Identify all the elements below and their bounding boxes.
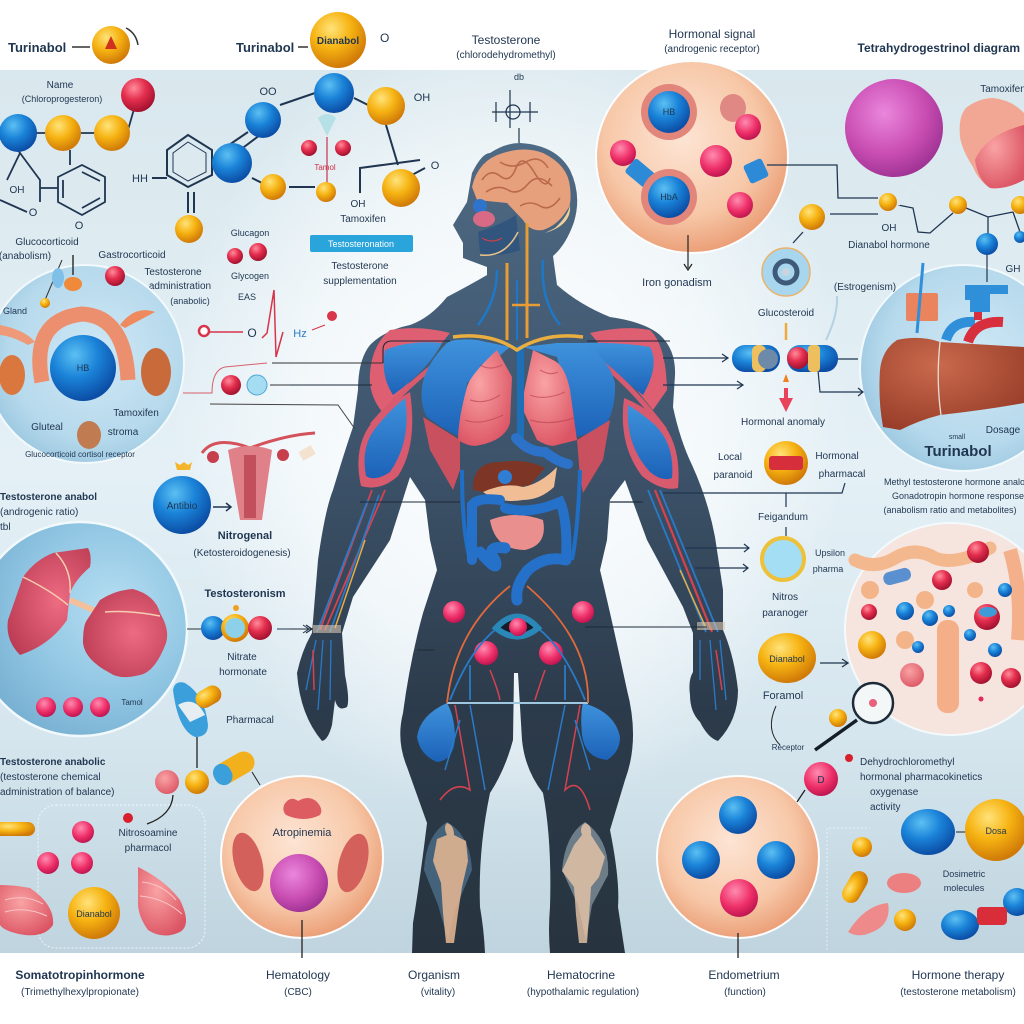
icon: capsules left: Pharmacal — [226, 715, 274, 726]
icon: gold ring sphere with labels: pharmacal — [819, 469, 865, 480]
molecule: top left ring: (Chloroprogesteron) — [22, 94, 102, 104]
top-left labels: Glucagon — [231, 228, 269, 238]
panel: bottom right circle: D — [817, 775, 825, 786]
chest muscles — [422, 339, 510, 437]
icon: lens ring with labels: Upsilon — [815, 548, 845, 558]
panel: left receptor circle: stroma — [108, 427, 139, 438]
panel: right liver circle: Turinabol — [924, 443, 992, 460]
heading: top centre: (chlorodehydromethyl) — [456, 50, 556, 61]
icon: uterus diagram — [202, 433, 316, 520]
top-left labels: (anabolic) — [170, 296, 210, 306]
top-left labels: Testosterone — [144, 267, 202, 278]
text block: mid left — [0, 492, 97, 533]
face organs — [473, 199, 487, 213]
icon: lens ring with labels — [685, 538, 845, 619]
molecule: right chain — [743, 158, 1024, 255]
icon: capsules pathway — [663, 323, 863, 428]
shoulder muscles — [384, 342, 442, 395]
lower flanks — [423, 417, 460, 490]
pelvic ring — [496, 616, 538, 636]
molecule: top centre — [132, 73, 440, 243]
text block: mid left: (androgenic ratio) — [0, 507, 78, 518]
panel: left kidney circle — [0, 522, 187, 736]
top-left labels: administration — [149, 281, 211, 292]
panel: left receptor circle: Glucocorticoid cortisol receptor — [25, 450, 135, 459]
molecule: top centre: HH — [132, 173, 148, 185]
panel: left kidney circle: Tamol — [121, 698, 143, 707]
panel: top centre circle: Iron gonadism — [642, 277, 712, 289]
text block: right liver caption: Gonadotropin hormone response — [892, 491, 1024, 501]
panel: left receptor circle — [0, 255, 184, 463]
panel: bottom left pills: Nitrosoamine — [119, 828, 178, 839]
heading: top right centre: (androgenic receptor) — [664, 44, 760, 55]
label: blue banner: Testosterone — [331, 261, 389, 272]
molecule: top centre: O — [431, 160, 440, 172]
molecule: top left ring: OH — [10, 185, 24, 196]
panel: right liver circle — [860, 255, 1024, 471]
body vessels — [306, 490, 726, 810]
text block: mid left: Testosterone anabol — [0, 492, 97, 503]
text block: right liver caption: (anabolism ratio and metabolites) — [883, 505, 1017, 515]
heading: top right centre — [664, 27, 760, 55]
panel: left receptor circle: Gland — [3, 306, 27, 316]
molecule: top left ring: Name — [47, 80, 74, 91]
heart rate trace — [199, 290, 337, 357]
text block: right liver caption — [883, 477, 1024, 515]
icon: lens ring with labels: paranoger — [762, 608, 808, 619]
heading: top left: Turinabol — [8, 40, 66, 55]
footer labels — [15, 968, 1016, 998]
top-left labels: Glycogen — [231, 271, 269, 281]
panel: left receptor circle: Gluteal — [31, 422, 63, 433]
panel: left receptor circle: Tamoxifen — [113, 408, 159, 419]
top-left labels: Glucocorticoid — [15, 237, 79, 248]
panel: bottom right pills: molecules — [944, 883, 985, 893]
text block: lower left — [0, 757, 115, 798]
deltoid muscle right — [590, 328, 667, 410]
label: blue banner: Tamoxifen — [340, 214, 386, 225]
molecule: testosterone chain: Nitrate — [227, 652, 257, 663]
text block: mid left: tbl — [0, 522, 11, 533]
panel: bottom right circle — [657, 762, 838, 958]
callout: red circle connectors — [183, 363, 383, 429]
footer labels: (vitality) — [421, 987, 455, 998]
molecule: top centre: OH — [350, 199, 366, 210]
footer labels: (hypothalamic regulation) — [527, 987, 639, 998]
heart rate trace: O — [247, 326, 257, 340]
molecule: right chain: OH — [882, 223, 896, 234]
text block: lower right: Dehydrochloromethyl — [860, 757, 954, 768]
panel: top right spheres — [845, 79, 1024, 188]
thigh muscles — [417, 703, 455, 762]
heading: top right: Tetrahydrogestrinol diagram — [858, 41, 1020, 55]
icon: blue sphere with label: Antibio — [167, 501, 198, 512]
text block: lower right — [845, 754, 982, 813]
footer labels: (function) — [724, 987, 766, 998]
footer labels: Hormone therapy — [912, 968, 1004, 982]
panel: top centre circle: HB — [663, 107, 675, 117]
icon: capsules pathway: Hormonal anomaly — [741, 417, 825, 428]
biceps — [358, 392, 412, 488]
molecule: top centre: OO — [259, 86, 277, 98]
footer labels: Organism — [408, 968, 460, 982]
top-left labels: EAS — [238, 292, 256, 302]
footer labels: Endometrium — [708, 968, 780, 982]
lung texture — [465, 365, 574, 423]
top-left labels — [0, 228, 269, 306]
panel: right cells circle — [845, 523, 1024, 735]
footer labels: Hematology — [266, 968, 330, 982]
heart rate trace: Hz — [293, 328, 307, 340]
panel: bottom right pills — [827, 799, 1024, 950]
text block: lower right: oxygenase — [870, 787, 919, 798]
text block: lower left: administration of balance) — [0, 787, 115, 798]
text block: lower right: activity — [870, 802, 901, 813]
intestines — [490, 515, 544, 550]
icon: gold capsule with magnifier — [758, 633, 893, 752]
panel: bottom right pills: Dosa — [985, 826, 1007, 836]
panel: bottom right pills: Dosimetric — [943, 869, 986, 879]
small structure above head — [492, 72, 538, 143]
central vessel — [517, 345, 524, 440]
brain — [472, 150, 571, 230]
molecule: testosterone chain: hormonate — [219, 667, 267, 678]
top-left labels: Gastrocorticoid — [98, 250, 166, 261]
text block: lower left: (testosterone chemical — [0, 772, 101, 783]
heading: top left — [8, 26, 138, 64]
footer labels: (CBC) — [284, 987, 312, 998]
heading: top centre-left with gold molecule: O — [380, 31, 389, 45]
molecule: testosterone chain: Testosteronism — [204, 588, 286, 600]
text block: lower right: hormonal pharmacokinetics — [860, 772, 982, 783]
heading: top centre-left with gold molecule: Dianabol — [317, 36, 359, 47]
icon: gold ring sphere with labels — [610, 441, 865, 536]
panel: top centre circle: HbA — [660, 192, 678, 202]
footer labels: Hematocrine — [547, 968, 615, 982]
silhouette — [297, 143, 738, 953]
heading: top centre-left with gold molecule: Turinabol — [236, 40, 294, 55]
icon: gold capsule with magnifier: Dianabol — [769, 654, 805, 664]
top-left labels: (anabolism) — [0, 251, 51, 262]
molecule: top left ring: O — [75, 220, 84, 232]
icon: swirl circle and label: (Estrogenism) — [834, 282, 896, 293]
panel: bottom left pills: pharmacol — [125, 843, 171, 854]
molecule: top left ring: O — [29, 207, 38, 219]
icon: gold ring sphere with labels: paranoid — [714, 470, 752, 481]
molecule: top centre: OH — [414, 92, 430, 104]
icon: lens ring with labels: pharma — [813, 564, 843, 574]
icon: swirl circle and label: Glucosteroid — [758, 308, 814, 319]
icon: blue sphere with label — [153, 462, 291, 559]
heading: top right centre: Hormonal signal — [669, 27, 755, 41]
label: blue banner: Testosteronation — [328, 239, 394, 249]
diagonal bands — [372, 345, 665, 430]
neck vessels — [478, 223, 560, 340]
heading: top centre-left with gold molecule — [236, 12, 389, 68]
icon: gold ring sphere with labels: Hormonal — [815, 451, 859, 462]
molecule: top centre: Tamol — [314, 163, 336, 172]
panel: bottom circle atrophy: Atropinemia — [273, 827, 332, 839]
figure halos — [424, 822, 472, 940]
small structure above head: db — [514, 72, 524, 82]
panel: left receptor circle: HB — [77, 363, 89, 373]
panel: top centre circle — [596, 61, 788, 289]
icon: blue sphere with label: Nitrogenal — [218, 530, 272, 542]
pelvic glands — [443, 601, 465, 623]
icon: capsules left — [147, 682, 274, 824]
panel: bottom left pills — [0, 805, 205, 948]
abdominal organs — [462, 470, 580, 560]
lungs — [458, 350, 512, 446]
icon: gold capsule with magnifier: Receptor — [772, 743, 805, 752]
body figure — [297, 143, 738, 953]
heading: top centre — [456, 33, 556, 61]
molecule: top left ring — [0, 78, 155, 232]
deltoid muscle left — [370, 328, 450, 413]
icon: gold ring sphere with labels: Feigandum — [758, 512, 808, 523]
molecule: right chain: Dianabol hormone — [848, 240, 930, 251]
icon: swirl circle and label — [758, 248, 896, 340]
label: blue banner: supplementation — [323, 276, 397, 287]
panel: right liver circle: small — [949, 434, 966, 441]
panel: right liver circle: GH — [1006, 264, 1020, 275]
left forearm vessels — [320, 490, 385, 630]
text block: lower left: Testosterone anabolic — [0, 757, 106, 768]
arrows: body connectors — [290, 341, 707, 650]
panel: bottom left pills: Dianabol — [76, 909, 112, 919]
icon: lens ring with labels: Nitros — [772, 592, 798, 603]
footer labels: (Trimethylhexylpropionate) — [21, 987, 139, 998]
footer labels: (testosterone metabolism) — [900, 987, 1016, 998]
label: blue banner — [310, 214, 413, 287]
small human figures — [433, 823, 468, 943]
footer labels: Somatotropinhormone — [15, 968, 145, 982]
collar arcs — [453, 336, 583, 350]
icon: blue sphere with label: (Ketosteroidogenesis) — [193, 548, 291, 559]
panel: right liver circle: Dosage — [986, 425, 1021, 436]
wrist bands — [313, 625, 341, 633]
icon: gold ring sphere with labels: Local — [718, 452, 742, 463]
heading: top centre: Testosterone — [472, 33, 541, 47]
right forearm vessels — [648, 490, 718, 632]
panel: bottom circle atrophy — [221, 776, 383, 958]
icon: gold capsule with magnifier: Foramol — [763, 690, 803, 702]
molecule: testosterone chain — [187, 588, 309, 678]
